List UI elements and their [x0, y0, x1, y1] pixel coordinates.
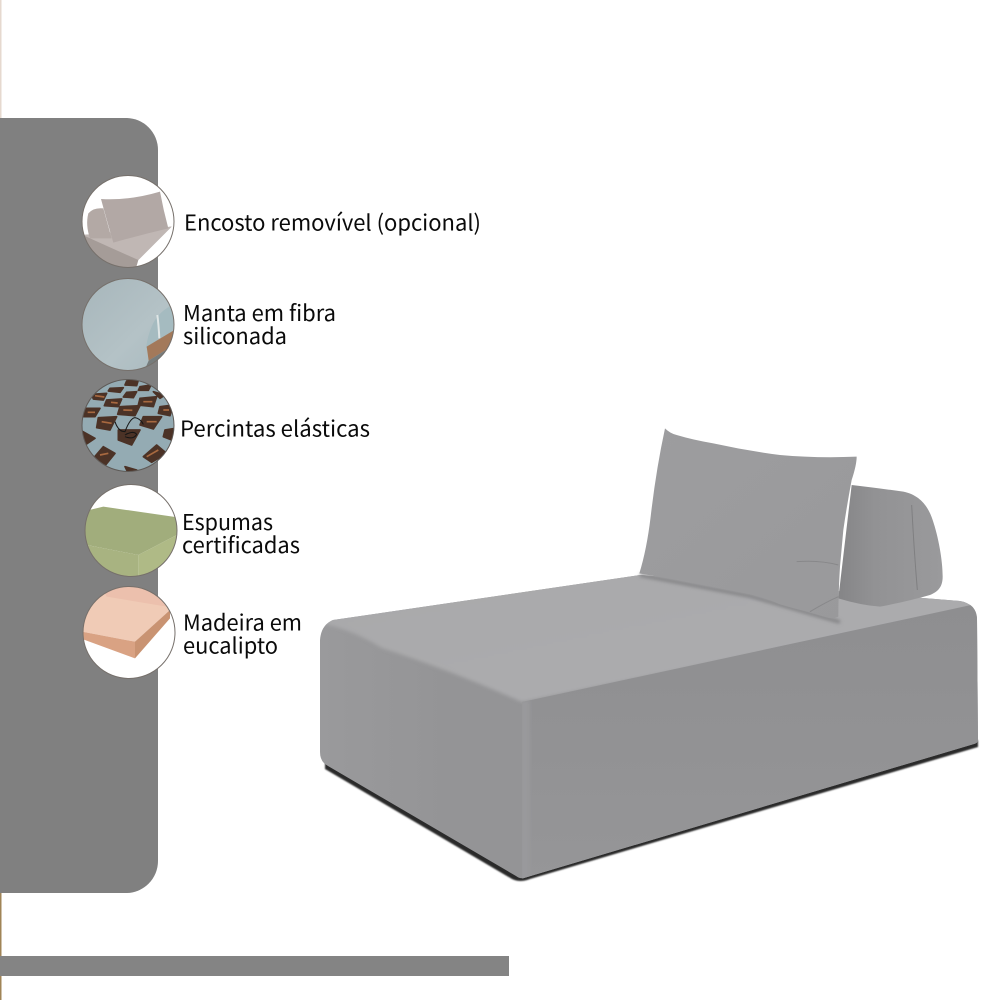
panel: grey sidebar	[0, 118, 158, 893]
icon: eucalyptus wood	[78, 583, 175, 678]
label: removable backrest: Encosto removível (opcional)	[184, 206, 481, 238]
label: eucalyptus wood: Madeira em	[183, 606, 302, 638]
bottom grey bar	[0, 956, 509, 976]
left edge sliver top	[0, 0, 2, 118]
icon: removable backrest	[80, 176, 174, 272]
sofa chaise	[315, 428, 990, 888]
icon: elastic webbing	[80, 380, 175, 473]
icon: certified foam	[83, 484, 180, 580]
sofa base	[315, 565, 990, 888]
label: eucalyptus wood line 2: eucalipto	[183, 628, 278, 660]
icon: silicone fibre blanket	[82, 278, 177, 377]
label: elastic webbing: Percintas elásticas	[180, 412, 370, 444]
label: certified foam: Espumas	[182, 505, 273, 537]
label: certified foam line 2: certificadas	[182, 528, 300, 560]
label: silicone fibre blanket line 2: siliconada	[183, 319, 287, 351]
left edge sliver bottom	[0, 893, 2, 1000]
pillow contact shadow	[640, 575, 840, 622]
back pillow	[639, 428, 857, 618]
label: silicone fibre blanket: Manta em fibra	[183, 296, 336, 328]
sofa floor shadow	[325, 740, 978, 881]
bolster cushion	[838, 485, 943, 607]
